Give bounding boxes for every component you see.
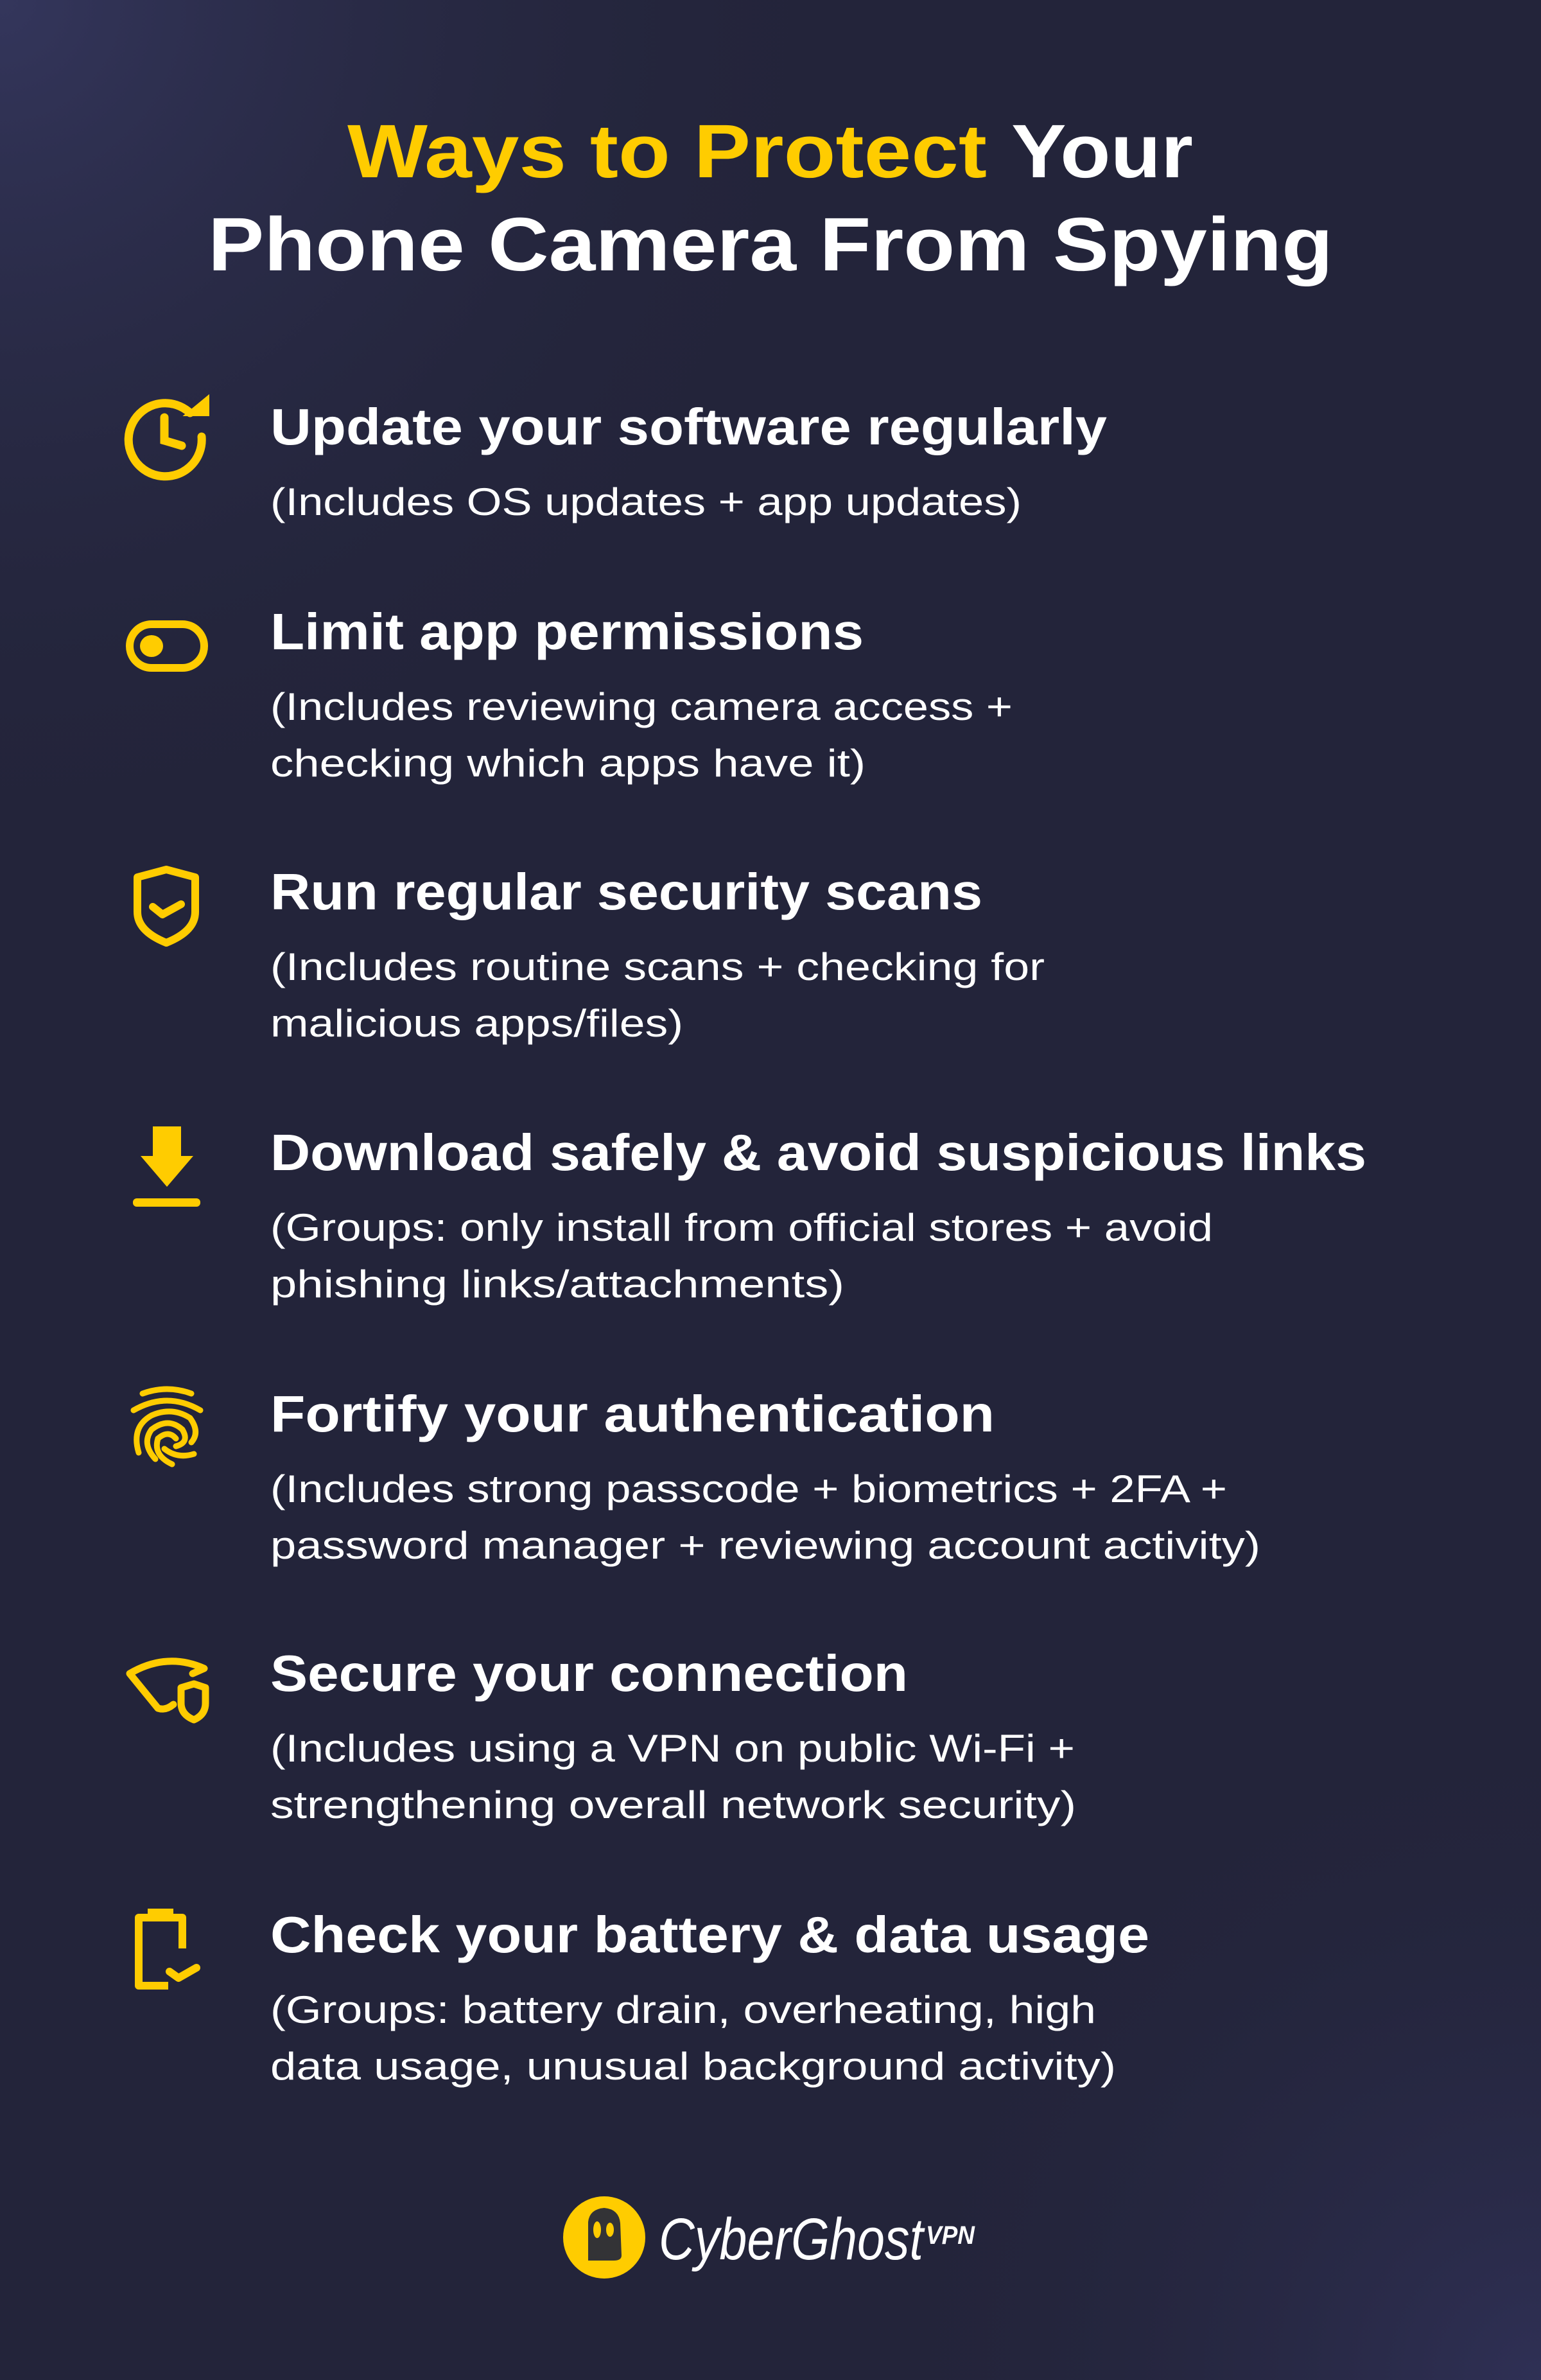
item 5: authentication — [134, 1385, 1260, 1567]
item 4: download safely — [133, 1124, 1366, 1306]
icon: shield check — [137, 870, 195, 943]
logo: CyberGhost VPN — [563, 2196, 975, 2279]
item 6: secure connection — [130, 1645, 1076, 1826]
item 7: battery & data: (Groups: battery drain, overheating, high — [270, 1988, 1096, 2031]
item 2: limit app permissions: checking which apps have it) — [270, 742, 866, 785]
item 6: secure connection: strengthening overall network security) — [270, 1783, 1076, 1826]
item 5: authentication: Fortify your authentication — [270, 1385, 995, 1442]
item 4: download safely: Download safely & avoid suspicious links — [270, 1124, 1366, 1181]
logo: CyberGhost VPN: CyberGhost — [659, 2207, 925, 2272]
item 2: limit app permissions: Limit app permissions — [270, 603, 864, 660]
icon: download — [133, 1126, 200, 1207]
icon: wifi shield — [130, 1661, 205, 1720]
icon: clock refresh — [128, 397, 208, 477]
title — [208, 109, 1333, 287]
item 2: limit app permissions — [130, 603, 1013, 785]
item 1: update software — [128, 397, 1108, 523]
icon: battery check — [139, 1909, 196, 1986]
item 4: download safely: (Groups: only install from official stores + avoid — [270, 1206, 1213, 1249]
title: Ways to Protect — [347, 109, 987, 194]
item 1: update software: Update your software regularly — [270, 398, 1108, 455]
item 2: limit app permissions: (Includes reviewing camera access + — [270, 685, 1013, 728]
item 4: download safely: phishing links/attachments) — [270, 1263, 844, 1306]
icon: toggle — [130, 624, 204, 668]
item 7: battery & data — [139, 1906, 1149, 2088]
item 7: battery & data: data usage, unusual background activity) — [270, 2045, 1116, 2088]
item 3: security scans — [137, 863, 1045, 1045]
item 5: authentication: (Includes strong passcode + biometrics + 2FA + — [270, 1467, 1227, 1510]
item 3: security scans: malicious apps/files) — [270, 1002, 683, 1045]
title: Phone Camera From Spying — [208, 202, 1333, 287]
item 1: update software: (Includes OS updates + app updates) — [270, 480, 1022, 523]
title: Your — [1011, 109, 1193, 194]
item 5: authentication: password manager + reviewing account activity) — [270, 1524, 1260, 1567]
item 3: security scans: (Includes routine scans + checking for — [270, 945, 1045, 988]
item 7: battery & data: Check your battery & data usage — [270, 1906, 1149, 1963]
item 3: security scans: Run regular security scans — [270, 863, 982, 920]
item 6: secure connection: Secure your connection — [270, 1645, 908, 1702]
icon: fingerprint — [134, 1389, 200, 1464]
logo: CyberGhost VPN: VPN — [926, 2221, 975, 2250]
item 6: secure connection: (Includes using a VPN on public Wi-Fi + — [270, 1727, 1075, 1770]
